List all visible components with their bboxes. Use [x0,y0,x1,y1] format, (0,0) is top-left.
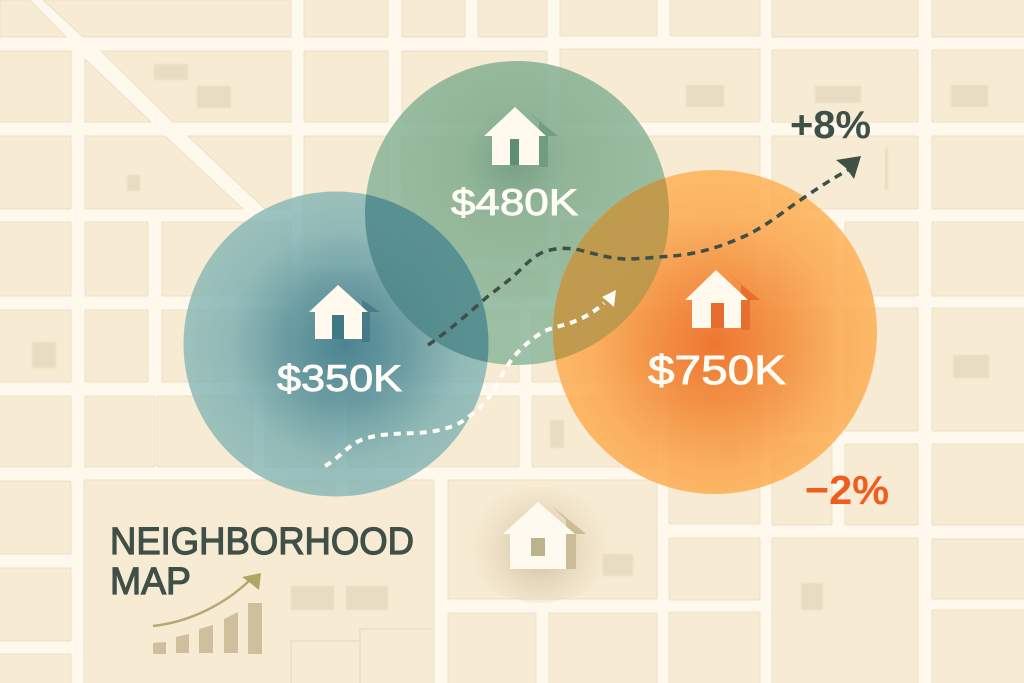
title: NEIGHBORHOOD [110,521,414,563]
title: MAP [110,561,191,603]
dashed path: white trend line [325,290,616,466]
house marker: low price [309,285,380,342]
faint parcel outlines [291,629,432,683]
overlap: orange and green zones [553,178,669,360]
price label: $350K: $350K [277,358,402,399]
price zone: $350K blue circle [184,192,488,496]
overlap: blue and green zones [365,194,488,362]
price label: $480K: $480K [451,182,578,223]
price label: $750K: $750K [648,347,786,393]
house marker: neutral with halo [465,487,615,603]
title [110,521,414,603]
dashed trend line: rising to +8% [428,156,861,345]
road stub inside large block [336,480,348,496]
house marker: mid price [484,107,558,167]
mini bar chart with growth arrow [153,573,262,654]
house marker: high price [685,270,760,330]
change label: −2%: −2% [805,467,889,513]
change label: +8%: +8% [790,104,871,147]
price zone: $750K orange circle [553,170,877,494]
price zone: $480K green circle [365,61,669,365]
building footprints [32,64,989,610]
